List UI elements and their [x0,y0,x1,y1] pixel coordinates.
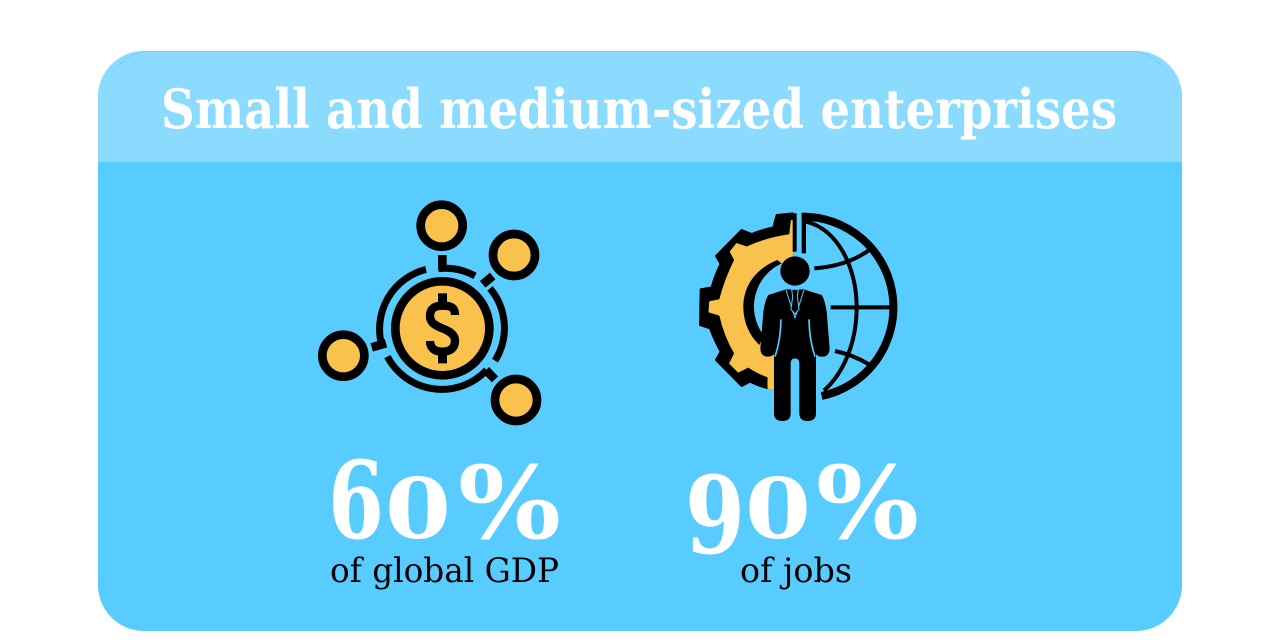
statistic: 60%: 0 [385,460,451,558]
panel: enterprises card [98,51,1182,631]
statistic: 90% [685,444,919,579]
panel: header band [98,51,1182,162]
title: Small and medium-sized enterprises [161,77,1117,141]
icon: businessman with gear and globe [700,213,893,421]
statistic: 90%: 9 [685,454,745,579]
statistic: 60% [328,439,561,564]
statistic: 90%: 0 [745,460,811,558]
caption: of jobs: of jobs [740,551,852,591]
icon: money network [322,205,537,421]
caption: of global GDP: of global GDP [330,551,559,591]
statistic: 60%: 6 [328,439,384,564]
statistic: 90%: % [816,444,919,562]
statistic: 60%: % [458,444,561,562]
